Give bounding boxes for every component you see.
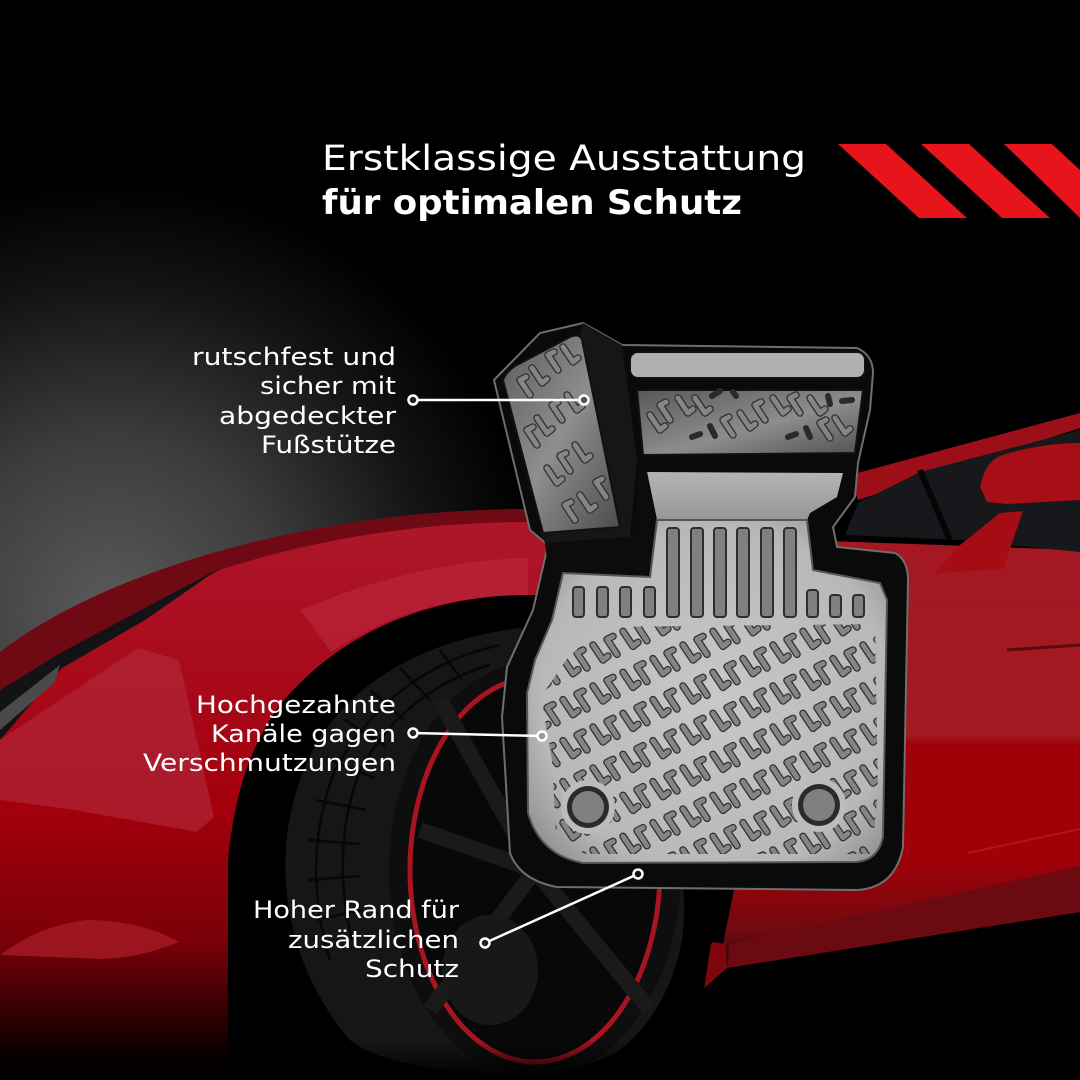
headlight slit	[0, 568, 220, 740]
mirror arm	[935, 511, 1023, 573]
roof band	[850, 413, 1080, 500]
wheel rim	[410, 678, 660, 1062]
main tray	[527, 520, 887, 863]
callout 1: abgedeckter	[219, 402, 396, 430]
front fender	[0, 509, 570, 1080]
tyre	[285, 628, 684, 1074]
callout 3: zusätzlichen	[288, 926, 459, 954]
channels	[573, 528, 864, 617]
window	[845, 430, 1080, 552]
door crease	[1007, 645, 1080, 650]
fixing clip right	[792, 778, 846, 832]
callout 2: Hochgezahnte	[196, 691, 396, 719]
sill	[727, 866, 1080, 968]
footrest panel	[503, 336, 620, 533]
callout 1: Fußstütze	[261, 431, 396, 459]
callout 1: sicher mit	[260, 372, 396, 400]
callout 2	[143, 691, 546, 777]
black wheel arch area	[228, 595, 720, 1080]
fender reflection	[0, 648, 214, 832]
upper pad	[647, 472, 843, 520]
title: Erstklassige Ausstattung	[322, 139, 806, 179]
fixing clip left	[561, 780, 615, 834]
callout 3: Schutz	[365, 955, 459, 983]
floor mat	[494, 323, 908, 890]
footrest wall	[540, 323, 637, 543]
callout 1: rutschfest und	[192, 343, 396, 371]
heel panel	[630, 352, 865, 455]
mirror	[980, 443, 1080, 504]
callout 2: Kanäle gagen	[211, 720, 396, 748]
callout 1	[192, 343, 588, 459]
front lip	[677, 942, 727, 998]
left well	[545, 470, 657, 600]
bottom fade	[0, 1040, 1080, 1080]
mat outer rim	[494, 323, 908, 890]
title: für optimalen Schutz	[322, 183, 742, 223]
red car	[0, 413, 1080, 1080]
callout 3: Hoher Rand für	[253, 896, 459, 924]
car side body	[723, 540, 1080, 968]
tread pattern	[535, 620, 885, 860]
title	[322, 139, 806, 223]
callout 3	[253, 870, 642, 983]
red stripes decoration	[838, 144, 1080, 218]
callout 2: Verschmutzungen	[143, 749, 396, 777]
